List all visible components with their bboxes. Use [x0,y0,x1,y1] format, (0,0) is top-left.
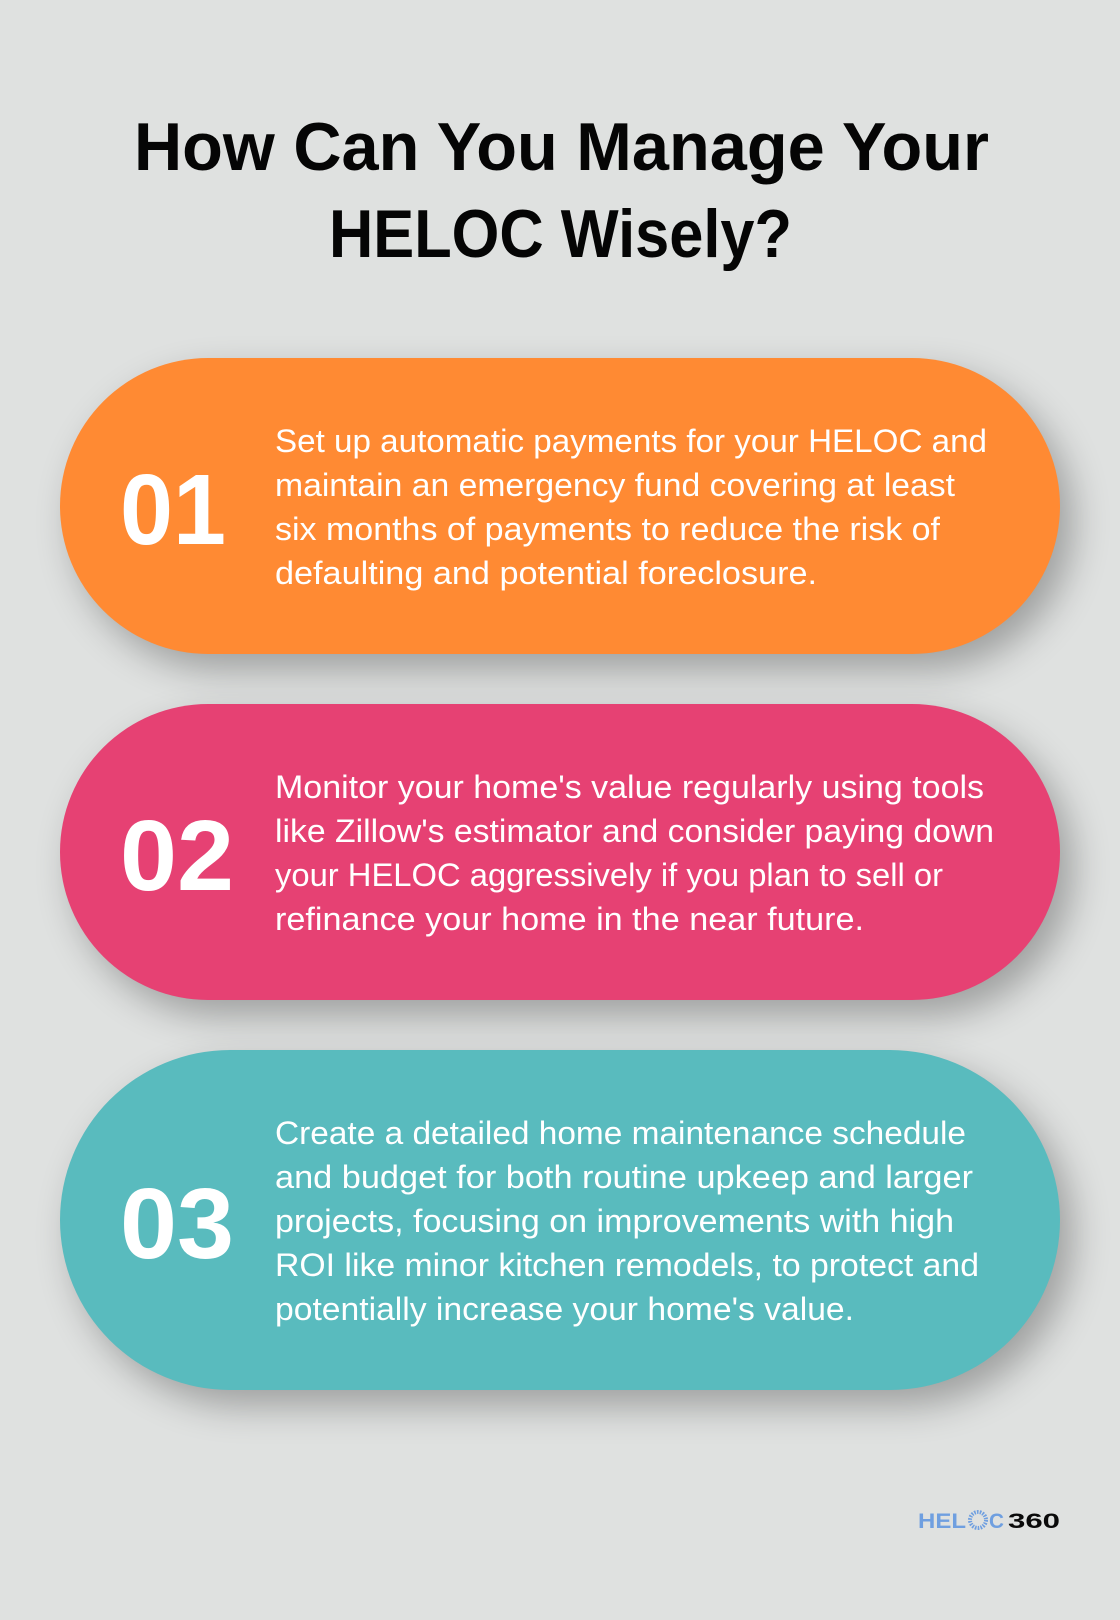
logo: HELOC360: HEL [918,1510,966,1533]
title [134,109,989,272]
text: step 01 description [275,423,987,591]
text: step 02 description: refinance your home in the near future. [275,901,864,937]
text: step 01 description: six months of payments to reduce the risk of [275,511,940,547]
number 03: 03 [120,1168,234,1280]
text: step 03 description: Create a detailed home maintenance schedule [275,1115,966,1151]
panel: step 02 [60,704,1060,1000]
text: step 02 description [275,769,994,937]
text: step 03 description: and budget for both routine upkeep and larger [275,1159,973,1195]
text: step 01 description: defaulting and potential foreclosure. [275,555,817,591]
text: step 02 description: like Zillow's estimator and consider paying down [275,813,994,849]
logo: HELOC360: 360 [1008,1510,1060,1533]
text: step 02 description: your HELOC aggressively if you plan to sell or [275,857,943,893]
text: step 02 description: Monitor your home's value regularly using tools [275,769,984,805]
number 02: 02 [120,800,234,912]
number 01: 01 [120,454,226,566]
text: step 01 description: Set up automatic payments for your HELOC and [275,423,987,459]
logo: HELOC360: C [989,1510,1004,1533]
title: HELOC Wisely? [329,196,792,272]
text: step 01 description: maintain an emergency fund covering at least [275,467,955,503]
panel: step 01 [60,358,1060,654]
text: step 03 description: potentially increase your home's value. [275,1291,854,1327]
text: step 03 description [275,1115,979,1327]
panel: step 03 [60,1050,1060,1390]
text: step 03 description: ROI like minor kitchen remodels, to protect and [275,1247,979,1283]
text: step 03 description: projects, focusing on improvements with high [275,1203,954,1239]
title: How Can You Manage Your [134,109,989,185]
